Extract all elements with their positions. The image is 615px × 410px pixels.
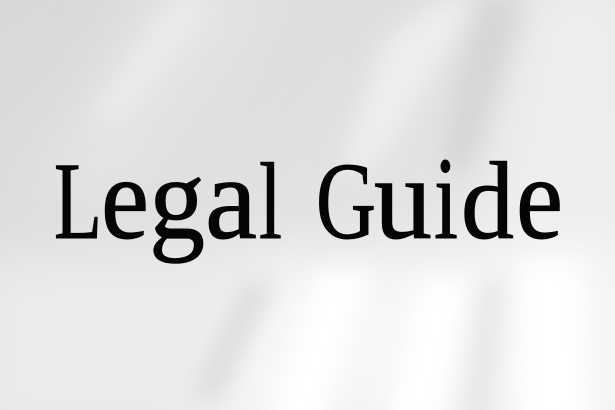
title: e [101, 133, 149, 264]
title: i [434, 133, 458, 264]
title: a [205, 133, 257, 264]
title [54, 133, 563, 264]
title: u [374, 133, 432, 264]
title: l [259, 141, 282, 262]
title: L [54, 140, 102, 262]
title: g [149, 133, 205, 264]
title: d [461, 140, 514, 262]
title: G [316, 140, 376, 262]
title: e [516, 133, 563, 264]
